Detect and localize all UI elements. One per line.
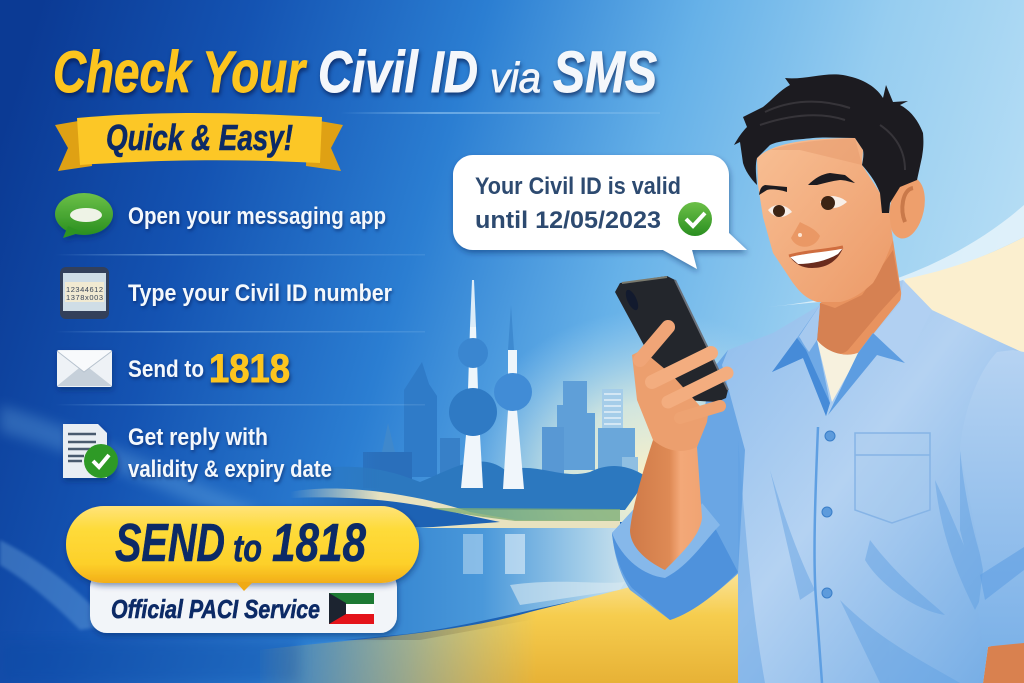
left collar: [772, 305, 830, 416]
eyebrows: [759, 173, 855, 195]
title: SMS: [553, 40, 657, 105]
right forearm: [983, 643, 1024, 683]
right sleeve: [960, 350, 1024, 647]
step 1: open messaging app: [55, 193, 386, 238]
title: via: [490, 54, 541, 101]
placket, buttons and pocket: [815, 427, 930, 683]
man with phone: [612, 74, 1024, 683]
step 4: get reply: Get reply with: [128, 424, 268, 451]
ear: [884, 174, 930, 242]
step 3: send to 1818: 1818: [209, 347, 290, 391]
shirt folds: [738, 440, 985, 683]
step 2: type Civil ID: Type your Civil ID number: [128, 280, 392, 307]
undershirt: [817, 340, 860, 402]
icon: phone with number: [60, 267, 109, 319]
forearm: [630, 440, 702, 570]
phone: [615, 276, 728, 402]
nose: [791, 222, 820, 247]
call-to-action button: to: [233, 528, 262, 570]
official PACI service tag: Official PACI Service: [111, 594, 320, 624]
ribbon: Quick & Easy: [55, 113, 343, 171]
call-to-action button: [66, 506, 419, 591]
Kuwait towers: [449, 280, 532, 489]
shirt body: [722, 280, 1024, 683]
tree line: [332, 462, 642, 510]
hand: [632, 327, 727, 451]
call-to-action button: SEND: [115, 513, 225, 573]
call-to-action button: 1818: [272, 513, 366, 573]
step 4: get reply: [63, 424, 332, 483]
bay water, shore and sand: [260, 489, 760, 683]
icon: document with check: [63, 424, 118, 478]
step 2: type Civil ID: [60, 267, 392, 319]
Kuwait city skyline: [332, 280, 642, 510]
step 3: send to 1818: [57, 347, 290, 391]
left sleeve: [612, 350, 760, 620]
step 4: get reply: validity & expiry date: [128, 456, 332, 483]
smile: [789, 247, 843, 268]
face: [757, 138, 893, 302]
icon: envelope: [57, 350, 112, 387]
title: Civil ID: [318, 40, 478, 105]
icon: Kuwait flag: [329, 593, 374, 624]
title: Check Your: [53, 40, 308, 105]
icon: phone with number: 12344612: [66, 285, 103, 294]
title: [53, 40, 657, 105]
distant buildings: [382, 362, 638, 478]
icon: phone with number: 1378x003: [66, 293, 103, 302]
icon: green chat bubble: [55, 193, 113, 238]
speech bubble: Your Civil ID is valid: [475, 173, 681, 200]
eyes: [768, 196, 847, 217]
icon: green check: [678, 202, 712, 236]
speech bubble: until 12/05/2023: [475, 207, 661, 234]
step 1: open messaging app: Open your messaging app: [128, 203, 386, 230]
official PACI service tag: [90, 570, 397, 633]
speech bubble: [453, 155, 747, 269]
ribbon: Quick & Easy: Quick & Easy!: [106, 117, 293, 158]
hair: [734, 74, 923, 213]
neck: [817, 240, 902, 355]
right collar: [858, 280, 932, 363]
step 3: send to 1818: Send to: [128, 356, 204, 383]
